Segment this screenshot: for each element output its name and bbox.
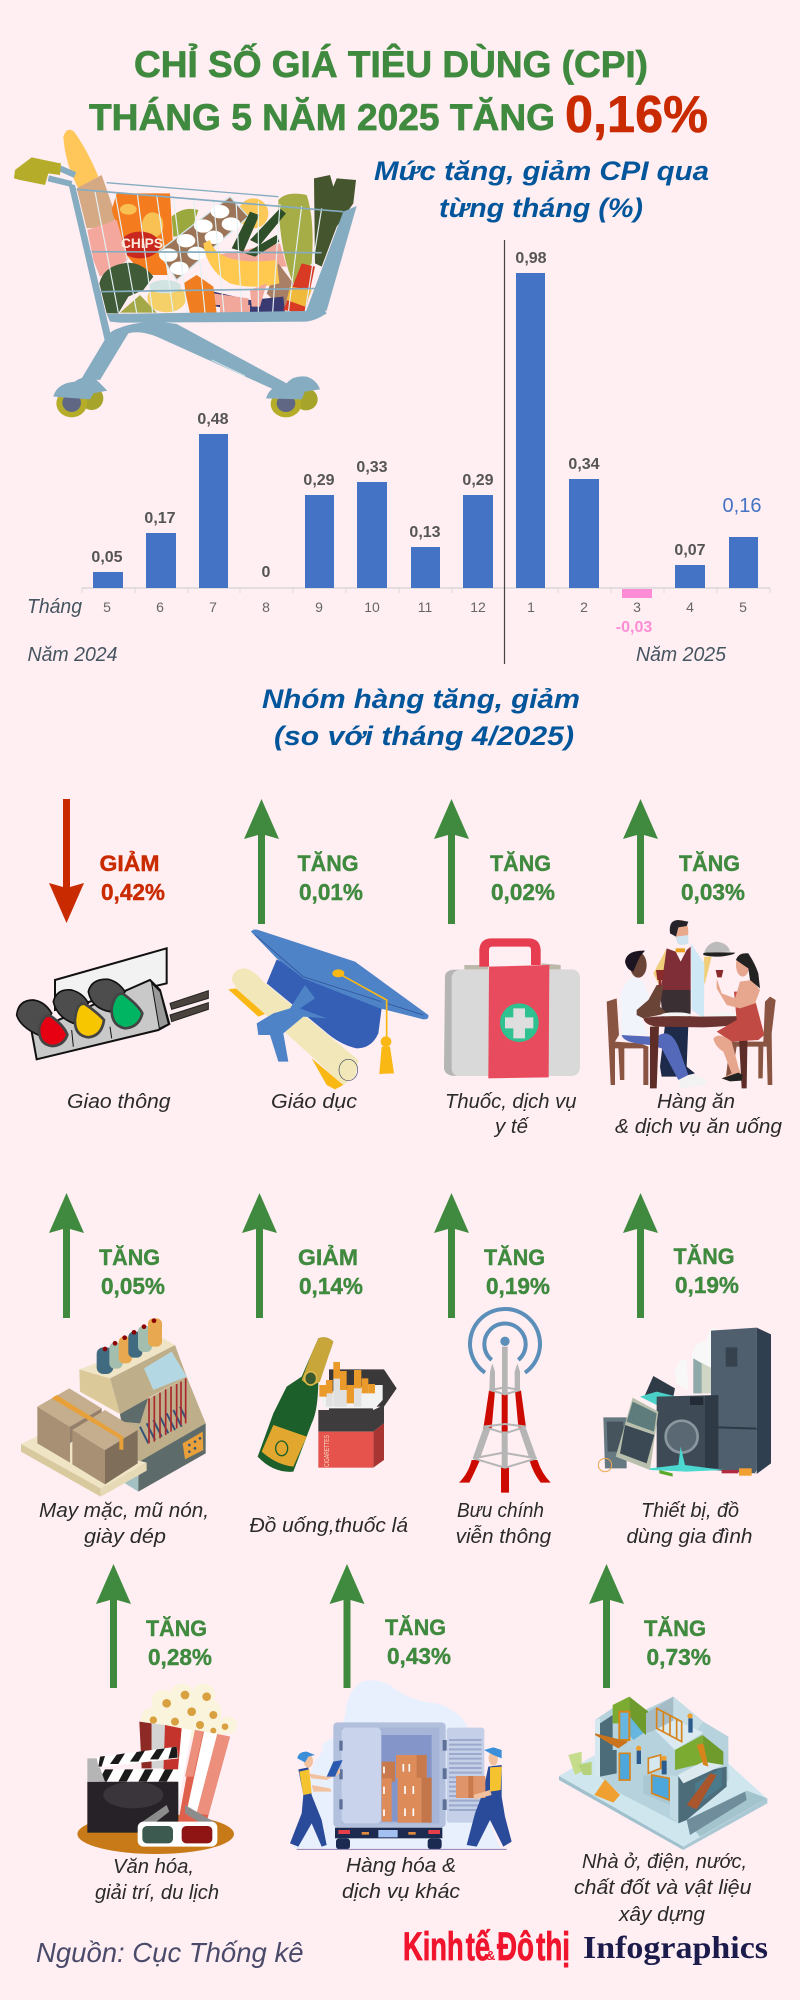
heading: product groups bbox=[262, 684, 580, 751]
icon: textile machine and boxes bbox=[21, 1318, 206, 1497]
icon: medical kit bbox=[444, 938, 580, 1078]
icon text: cigarettes: CIGARETTES bbox=[322, 1435, 331, 1467]
logo: Kinh tế & Đô thị Infographics: Infographics bbox=[583, 1929, 768, 1965]
item: Thiết bị, đồ dùng gia đình bbox=[598, 1193, 771, 1548]
bar chart: monthly CPI: 8 bbox=[262, 599, 270, 615]
change label: 0,28% bbox=[148, 1644, 212, 1670]
bar chart: monthly CPI bbox=[27, 240, 770, 666]
caption: Bưu chính bbox=[457, 1500, 544, 1522]
change label bbox=[679, 851, 745, 905]
bar chart: monthly CPI: Năm 2024 bbox=[28, 644, 118, 666]
item: Thuốc, dịch vụ y tế bbox=[434, 799, 580, 1138]
caption: giải trí, du lịch bbox=[95, 1882, 219, 1904]
item: Giáo dục bbox=[228, 799, 428, 1113]
bar chart: monthly CPI: 0,33 bbox=[356, 459, 388, 476]
caption: dịch vụ khác bbox=[342, 1881, 460, 1903]
caption: Thuốc, dịch vụ bbox=[445, 1091, 576, 1113]
change label bbox=[298, 851, 363, 905]
change label bbox=[298, 1245, 363, 1299]
change label: 0,14% bbox=[299, 1273, 363, 1299]
change label: GIẢM bbox=[298, 1245, 358, 1270]
bar chart: monthly CPI: 0,07 bbox=[674, 542, 706, 559]
change label: TĂNG bbox=[679, 851, 740, 876]
bar chart: monthly CPI: 10 bbox=[364, 599, 380, 615]
logo: Kinh tế & Đô thị Infographics: Kinh tế bbox=[403, 1925, 491, 1969]
change label bbox=[100, 851, 165, 905]
source: Nguồn: Cục Thống kê bbox=[36, 1937, 304, 1968]
bar chart: monthly CPI: 9 bbox=[315, 599, 323, 615]
caption: Nhà ở, điện, nước, bbox=[582, 1851, 747, 1873]
caption bbox=[574, 1851, 752, 1926]
change label: GIẢM bbox=[100, 851, 160, 876]
icon: traffic light bbox=[17, 948, 208, 1059]
item: Nhà ở, điện, nước, chất đốt và vật liệu xây dựng bbox=[559, 1564, 767, 1926]
change label: TĂNG bbox=[385, 1615, 446, 1640]
bar chart: monthly CPI: 12 bbox=[470, 599, 486, 615]
bar chart: monthly CPI: -0,03 bbox=[616, 619, 652, 636]
bar chart: monthly CPI: 6 bbox=[156, 599, 164, 615]
logo: Kinh tế & Đô thị Infographics bbox=[403, 1925, 768, 1969]
bar chart: monthly CPI: 0 bbox=[262, 564, 271, 581]
change label: 0,42% bbox=[101, 879, 165, 905]
arrow up bbox=[49, 1193, 84, 1318]
change label: 0,19% bbox=[486, 1273, 550, 1299]
caption: May mặc, mũ nón, bbox=[39, 1500, 209, 1522]
change label: 0,02% bbox=[491, 879, 555, 905]
caption: Hàng ăn bbox=[657, 1091, 735, 1113]
caption bbox=[342, 1855, 460, 1903]
arrow up bbox=[434, 799, 469, 924]
caption bbox=[626, 1500, 752, 1548]
bar chart: monthly CPI: 0,13 bbox=[409, 524, 441, 541]
bar chart: monthly CPI: Tháng bbox=[27, 596, 82, 618]
change label: TĂNG bbox=[99, 1245, 160, 1270]
logo: Kinh tế & Đô thị Infographics: Đô thị bbox=[497, 1925, 570, 1969]
icon: champagne and cigarettes bbox=[258, 1337, 397, 1472]
bar chart: monthly CPI: 0,29 bbox=[462, 472, 494, 489]
arrow up bbox=[434, 1193, 469, 1318]
caption: dùng gia đình bbox=[626, 1526, 752, 1548]
heading: monthly CPI: Mức tăng, giảm CPI qua bbox=[374, 156, 709, 186]
change label: 0,19% bbox=[675, 1272, 739, 1298]
title: 0,16% bbox=[565, 86, 708, 144]
item: Văn hóa, giải trí, du lịch bbox=[77, 1564, 237, 1904]
change label: TĂNG bbox=[490, 851, 551, 876]
arrow up bbox=[330, 1564, 364, 1688]
caption: Giáo dục bbox=[271, 1091, 357, 1113]
title bbox=[89, 43, 708, 144]
arrow up bbox=[96, 1564, 131, 1688]
change label bbox=[99, 1245, 165, 1299]
caption: Giao thông bbox=[67, 1091, 170, 1113]
caption: Văn hóa, bbox=[113, 1856, 194, 1878]
change label bbox=[385, 1615, 451, 1669]
logo: Kinh tế & Đô thị Infographics: & bbox=[486, 1948, 495, 1963]
item: Bưu chính viễn thông bbox=[434, 1193, 551, 1548]
caption: Thiết bị, đồ bbox=[641, 1500, 739, 1522]
caption: Đồ uống,thuốc lá bbox=[250, 1515, 408, 1537]
bar chart: monthly CPI: 0,48 bbox=[197, 411, 229, 428]
icon: household appliances bbox=[598, 1327, 771, 1477]
caption: xây dựng bbox=[618, 1904, 705, 1926]
arrow down bbox=[49, 799, 84, 923]
heading: monthly CPI: từng tháng (%) bbox=[439, 193, 643, 223]
arrow up bbox=[589, 1564, 624, 1688]
bar chart: monthly CPI: 11 bbox=[418, 599, 432, 615]
change label: 0,01% bbox=[299, 879, 363, 905]
bar chart: monthly CPI: 1 bbox=[527, 599, 535, 615]
caption: y tế bbox=[493, 1116, 530, 1138]
bar chart: monthly CPI: Năm 2025 bbox=[636, 644, 727, 666]
change label: TĂNG bbox=[146, 1616, 207, 1641]
bar chart: monthly CPI: 5 bbox=[103, 599, 111, 615]
icon: graduation cap bbox=[228, 929, 428, 1089]
change label bbox=[146, 1616, 212, 1670]
icon: cinema popcorn and clapperboard bbox=[77, 1683, 237, 1854]
caption: & dịch vụ ăn uống bbox=[615, 1116, 782, 1138]
caption: viễn thông bbox=[456, 1525, 551, 1548]
change label: 0,73% bbox=[646, 1644, 711, 1670]
change label bbox=[674, 1244, 739, 1298]
caption bbox=[95, 1856, 219, 1904]
change label: TĂNG bbox=[484, 1245, 545, 1270]
change label: TĂNG bbox=[674, 1244, 734, 1269]
icon: telecom tower bbox=[459, 1309, 551, 1493]
caption bbox=[456, 1500, 551, 1548]
change label bbox=[644, 1616, 711, 1670]
change label bbox=[484, 1245, 550, 1299]
arrow up bbox=[242, 1193, 277, 1318]
bar chart: monthly CPI: 0,29 bbox=[303, 472, 335, 489]
heading: monthly CPI bbox=[374, 156, 709, 223]
bar chart: monthly CPI: 2 bbox=[580, 599, 588, 615]
caption: chất đốt và vật liệu bbox=[574, 1877, 752, 1899]
change label: 0,05% bbox=[101, 1273, 165, 1299]
caption: giày dép bbox=[84, 1526, 166, 1548]
arrow up bbox=[623, 1193, 658, 1318]
item: Hàng ăn & dịch vụ ăn uống bbox=[607, 799, 782, 1138]
arrow up bbox=[623, 799, 658, 924]
caption bbox=[615, 1091, 782, 1138]
item: May mặc, mũ nón, giày dép bbox=[21, 1193, 209, 1548]
title: THÁNG 5 NĂM 2025 TĂNG bbox=[89, 97, 555, 138]
change label bbox=[490, 851, 555, 905]
title: CHỈ SỐ GIÁ TIÊU DÙNG (CPI) bbox=[134, 43, 648, 85]
icon: isometric house bbox=[559, 1697, 767, 1850]
icon: delivery truck and workers bbox=[290, 1680, 512, 1849]
bar chart: monthly CPI: 7 bbox=[209, 599, 217, 615]
bar chart: monthly CPI: 0,34 bbox=[568, 456, 600, 473]
item: Hàng hóa & dịch vụ khác bbox=[290, 1564, 512, 1903]
bar chart: monthly CPI: 0,05 bbox=[91, 549, 123, 566]
heading: product groups: (so với tháng 4/2025) bbox=[274, 721, 574, 751]
change label: 0,43% bbox=[387, 1643, 451, 1669]
bar chart: monthly CPI: 4 bbox=[686, 599, 694, 615]
arrow up bbox=[244, 799, 279, 924]
bar chart: monthly CPI: 3 bbox=[633, 599, 641, 615]
bar chart: monthly CPI: 0,16 bbox=[723, 495, 761, 517]
item: Giao thông bbox=[17, 799, 208, 1113]
bar chart: monthly CPI: 0,98 bbox=[515, 250, 547, 267]
item: Đồ uống, thuốc lá bbox=[242, 1193, 408, 1537]
heading: product groups: Nhóm hàng tăng, giảm bbox=[262, 684, 580, 714]
caption: Hàng hóa & bbox=[346, 1855, 456, 1877]
change label: 0,03% bbox=[681, 879, 745, 905]
chips label on cart: CHIPS bbox=[121, 235, 163, 251]
icon: shopping cart bbox=[14, 130, 357, 417]
change label: TĂNG bbox=[644, 1616, 706, 1641]
bar chart: monthly CPI: 5 bbox=[739, 599, 747, 615]
icon: restaurant bbox=[607, 920, 776, 1088]
bar chart: monthly CPI: 0,17 bbox=[144, 510, 176, 527]
caption bbox=[39, 1500, 209, 1548]
change label: TĂNG bbox=[298, 851, 358, 876]
caption bbox=[445, 1091, 576, 1138]
